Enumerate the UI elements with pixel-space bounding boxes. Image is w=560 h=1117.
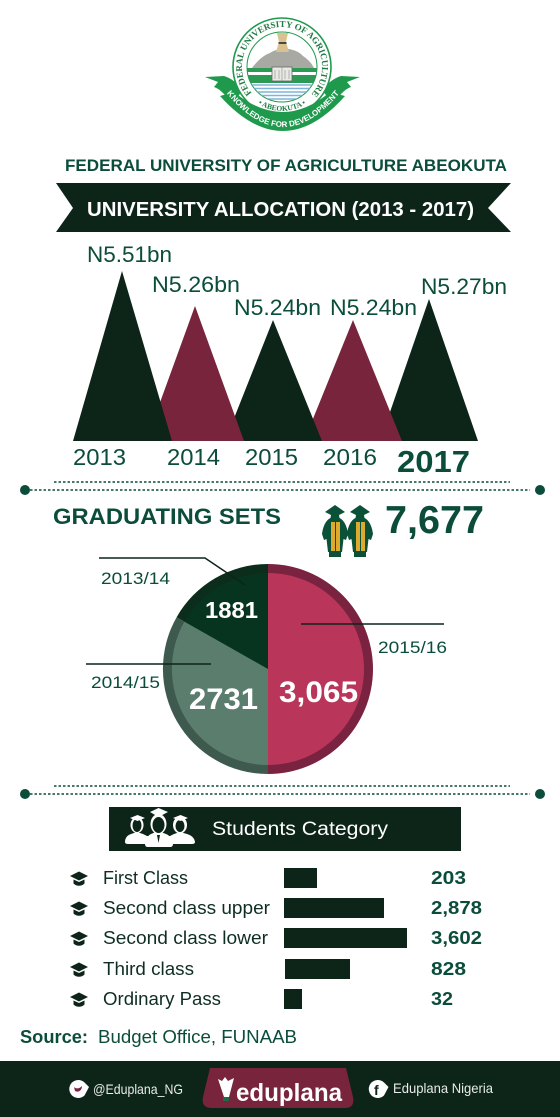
years: 2016	[323, 444, 377, 470]
pie labels: 2013/14	[101, 569, 170, 588]
years: 2013	[73, 444, 126, 470]
panel: students category heading: Students Category	[212, 819, 389, 840]
years: 2015	[245, 444, 298, 470]
pie values: 2731	[189, 683, 258, 716]
pie chart: graduating sets	[86, 558, 447, 774]
amounts: N5.51bn	[87, 242, 172, 267]
row: first class	[70, 868, 466, 888]
row: second class upper	[70, 898, 482, 918]
twitter handle: @Eduplana_NG	[93, 1081, 183, 1097]
amounts: N5.24bn	[330, 295, 417, 320]
row: ordinary pass: 32	[431, 989, 453, 1009]
banner: university allocation: UNIVERSITY ALLOCATION (2013 - 2017)	[87, 199, 474, 221]
years: 2014	[167, 444, 220, 470]
amounts: N5.27bn	[421, 274, 507, 299]
logo: university crest: FEDERAL UNIVERSITY OF AGRICULTURE	[236, 21, 328, 98]
ribbon band	[220, 92, 345, 131]
caps	[130, 815, 145, 821]
bodies	[125, 832, 195, 847]
row: third class: 828	[431, 959, 466, 979]
row: second class upper: Second class upper	[103, 898, 270, 918]
years	[73, 444, 470, 479]
pie values	[189, 597, 358, 716]
title: FEDERAL UNIVERSITY OF AGRICULTURE ABEOKUTA	[65, 156, 507, 175]
row: second class lower: 3,602	[431, 928, 482, 948]
row: second class lower: Second class lower	[103, 928, 268, 948]
panel: students category heading	[109, 807, 461, 851]
ribbon tails	[205, 76, 243, 104]
pie labels: 2014/15	[91, 673, 160, 692]
icon: facebook	[369, 1080, 388, 1098]
heads	[130, 817, 144, 833]
source: Budget Office, FUNAAB	[98, 1027, 297, 1047]
row: third class	[70, 959, 466, 979]
row: first class: 203	[431, 868, 466, 888]
callout lines	[86, 558, 444, 664]
icon: twitter	[69, 1080, 89, 1098]
icon: three graduates	[125, 808, 195, 847]
icon: graduates	[322, 505, 373, 557]
source: Source:	[20, 1027, 88, 1047]
amounts: N5.24bn	[234, 295, 321, 320]
pie labels	[91, 569, 447, 692]
brand logo: eduplana	[236, 1079, 343, 1107]
amounts: N5.26bn	[152, 272, 240, 297]
brand logo	[203, 1068, 353, 1108]
pie labels: 2015/16	[378, 638, 447, 657]
footer	[0, 1061, 560, 1117]
total graduates: 7,677	[385, 499, 484, 542]
pie values: 1881	[205, 597, 258, 623]
heading: graduating sets: GRADUATING SETS	[53, 504, 281, 529]
logo: university crest	[205, 17, 360, 131]
row: second class upper: 2,878	[431, 898, 482, 918]
amounts	[87, 242, 507, 320]
years: 2017	[397, 444, 470, 479]
row: third class: Third class	[103, 959, 194, 979]
row: ordinary pass	[70, 989, 453, 1009]
icon: facebook: f	[374, 1082, 379, 1098]
logo: university crest: • ABEOKUTA •	[259, 101, 305, 111]
pie values: 3,065	[279, 676, 358, 709]
logo: university crest: KNOWLEDGE FOR DEVELOPMENT	[227, 90, 338, 128]
triangle chart: allocation by year	[73, 242, 507, 479]
banner: university allocation	[56, 183, 511, 232]
row: first class: First Class	[103, 868, 188, 888]
facebook name: Eduplana Nigeria	[393, 1080, 493, 1096]
row: second class lower	[70, 928, 482, 948]
row: ordinary pass: Ordinary Pass	[103, 989, 221, 1009]
